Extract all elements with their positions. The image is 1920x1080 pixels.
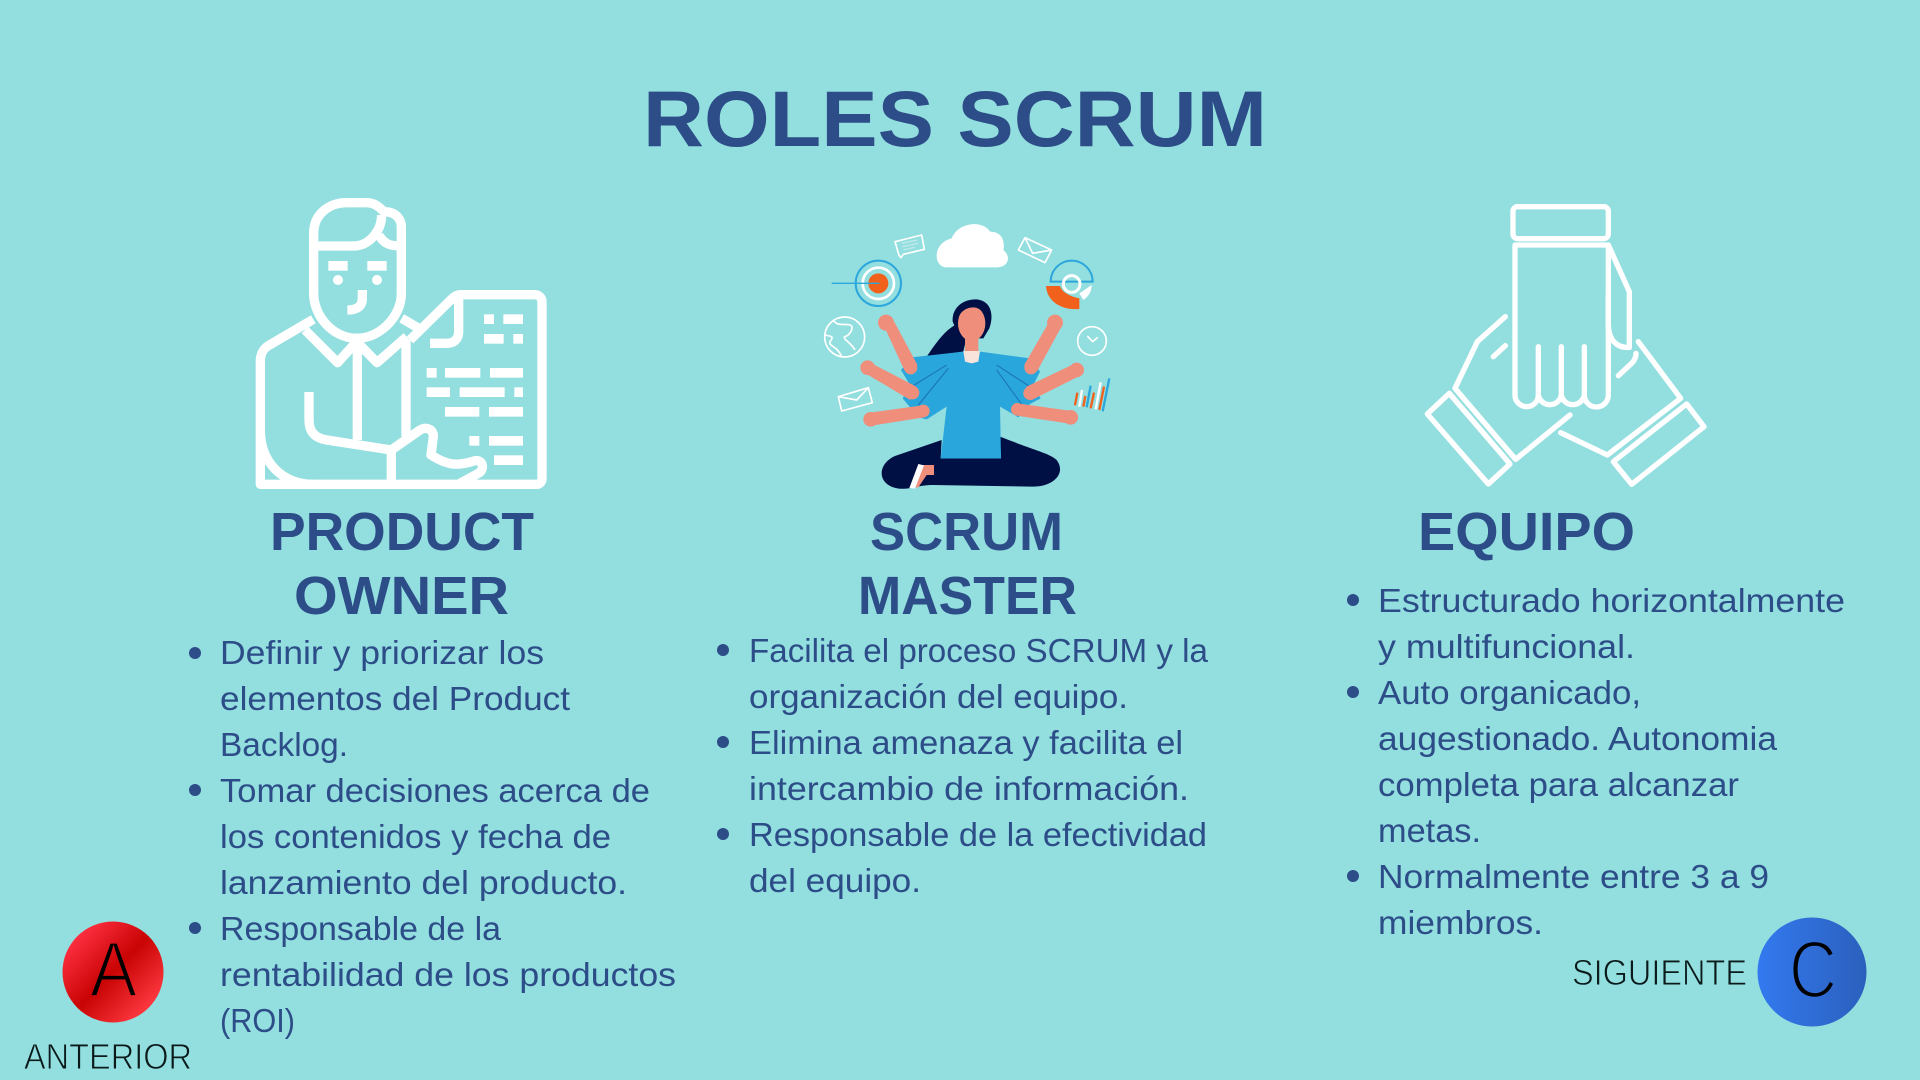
list: scrum master responsibilities: del equipo. — [749, 862, 921, 899]
list: product owner responsibilities: los contenidos y fecha de — [220, 818, 611, 855]
button: anterior: A — [90, 925, 137, 1013]
list: product owner responsibilities: Responsable de la — [220, 910, 502, 947]
list: scrum master responsibilities: Facilita el proceso SCRUM y la — [749, 632, 1209, 669]
list: product owner responsibilities: lanzamiento del producto. — [220, 864, 627, 901]
list: product owner responsibilities: Backlog. — [220, 726, 348, 763]
list: equipo characteristics: Estructurado horizontalmente — [1378, 582, 1845, 619]
button: siguiente: SIGUIENTE — [1572, 952, 1747, 993]
list: scrum master responsibilities: Elimina amenaza y facilita el — [749, 724, 1183, 761]
list: scrum master responsibilities — [717, 632, 1209, 899]
heading: scrum master: MASTER — [858, 566, 1077, 626]
list: product owner responsibilities — [189, 634, 676, 1039]
list: equipo characteristics — [1347, 582, 1845, 941]
heading: product owner: OWNER — [294, 566, 509, 626]
list: equipo characteristics: augestionado. Autonomia — [1378, 720, 1778, 757]
icon: product owner with document — [260, 203, 542, 484]
list: equipo characteristics: Auto organicado, — [1378, 674, 1641, 711]
button: siguiente: C — [1789, 925, 1837, 1015]
button: anterior — [24, 922, 192, 1077]
list: product owner responsibilities: elementos del Product — [220, 680, 570, 717]
heading: product owner: PRODUCT — [270, 502, 534, 562]
list: equipo characteristics: miembros. — [1378, 904, 1543, 941]
heading: scrum master — [858, 502, 1077, 626]
heading: product owner — [270, 502, 534, 626]
heading: equipo: EQUIPO — [1418, 502, 1635, 562]
list: equipo characteristics: metas. — [1378, 812, 1481, 849]
list: equipo characteristics: completa para alcanzar — [1378, 766, 1739, 803]
icon: three stacked hands — [1427, 207, 1704, 484]
list: scrum master responsibilities: intercambio de información. — [749, 770, 1189, 807]
icon: multitasking woman meditating — [825, 224, 1109, 489]
list: scrum master responsibilities: organización del equipo. — [749, 678, 1128, 715]
heading: scrum master: SCRUM — [870, 502, 1063, 562]
list: equipo characteristics: Normalmente entre 3 a 9 — [1378, 858, 1769, 895]
title: ROLES SCRUM — [643, 74, 1267, 163]
list: equipo characteristics: y multifuncional. — [1378, 628, 1635, 665]
list: product owner responsibilities: Definir y priorizar los — [220, 634, 544, 671]
list: product owner responsibilities: Tomar decisiones acerca de — [220, 772, 650, 809]
button: anterior: ANTERIOR — [24, 1036, 192, 1077]
list: product owner responsibilities: (ROI) — [220, 1002, 295, 1039]
button: siguiente — [1572, 918, 1866, 1026]
list: scrum master responsibilities: Responsable de la efectividad — [749, 816, 1207, 853]
list: product owner responsibilities: rentabilidad de los productos — [220, 956, 676, 993]
